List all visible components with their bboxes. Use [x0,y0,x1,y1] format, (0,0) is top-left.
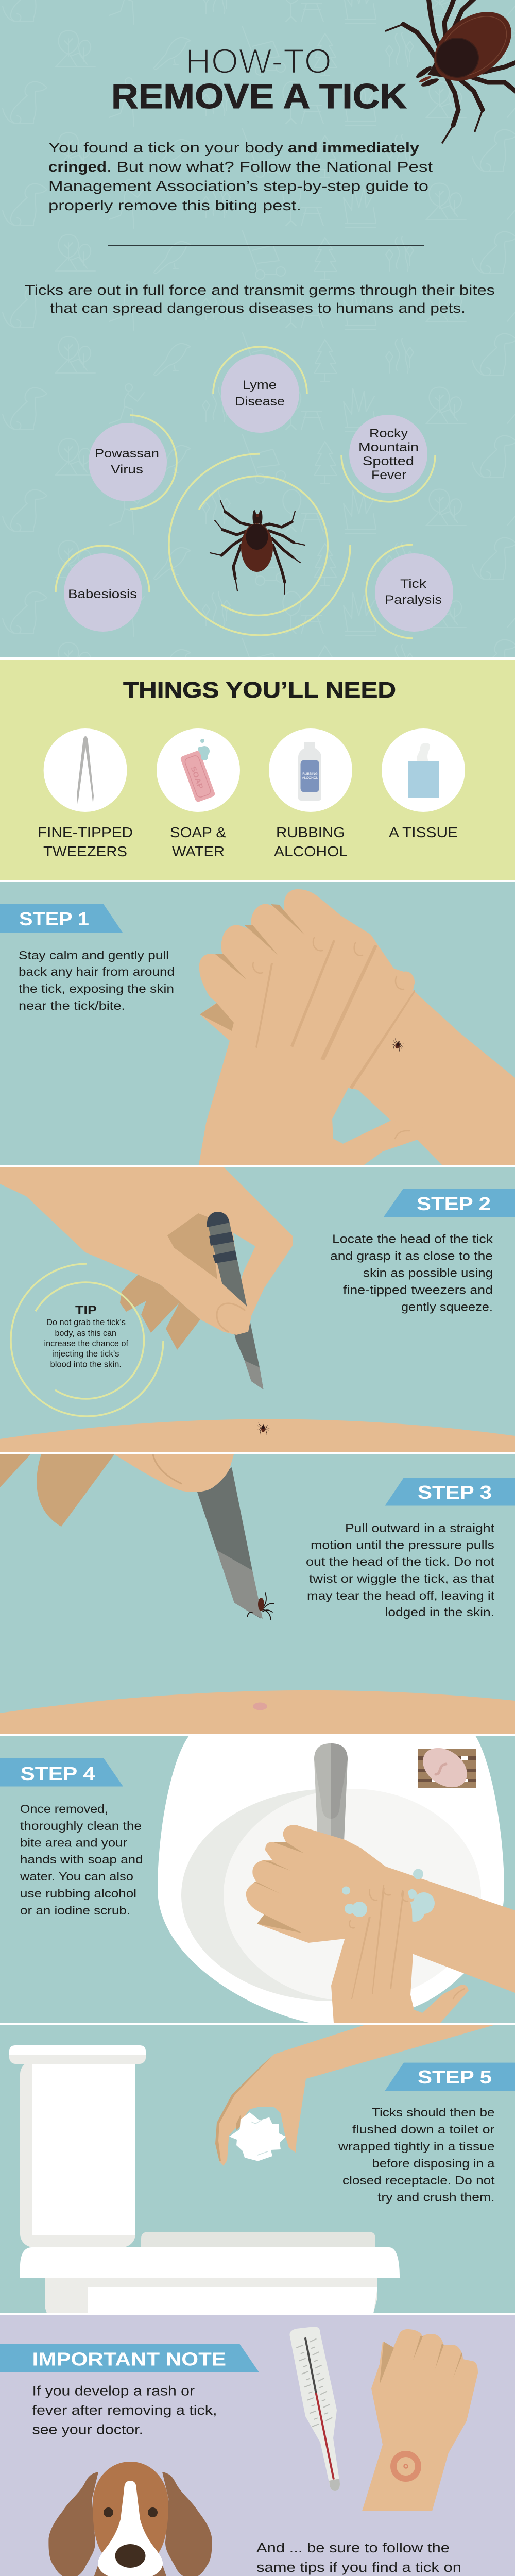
panel: things you'll need [0,660,515,880]
step 2 ribbon [384,1189,515,1217]
disease: Rocky Mountain Spotted Fever: Spotted [363,454,414,468]
disease: Babesiosis: Babesiosis [68,587,137,601]
step 1 text [19,948,175,1012]
step 5 ribbon: STEP 5 [418,2066,492,2088]
ticks paragraph: that can spread dangerous diseases to humans and pets. [50,300,466,316]
illustration: hand holding tissue [215,2025,494,2166]
step 2 text: gently squeeze. [401,1300,493,1314]
illustration: washing hand [331,1880,469,2023]
item: soap and water: WATER [172,843,225,859]
step 3 text [306,1521,495,1619]
step 4 text: hands with soap and [20,1853,143,1866]
icon: soap foam [342,1869,435,1922]
icon: tick held by tweezers [247,1593,274,1620]
item: rubbing alcohol: ALCOHOL [274,843,348,859]
illustration: skin bump [0,1419,515,1452]
tip callout: body, as this can [55,1329,116,1338]
step 5 text: try and crush them. [377,2191,494,2204]
disease: Tick Paralysis: Paralysis [385,593,442,607]
step 1 text: back any hair from around [19,965,175,978]
step 4 ribbon: STEP 4 [21,1763,95,1784]
intro paragraph: cringed [48,159,107,175]
note text: see your doctor. [32,2422,143,2437]
illustration: hand with tweezers [0,1167,293,1389]
intro paragraph: You found a tick on your body [48,140,283,156]
step 5 text [338,2106,495,2204]
item: rubbing alcohol: RUBBING [302,772,318,776]
note text: If you develop a rash or [32,2384,195,2399]
disease: Powassan Virus: Powassan [95,447,159,461]
disease: Rocky Mountain Spotted Fever: Fever [371,468,406,482]
step 2 text: and grasp it as close to the [330,1249,493,1262]
step 4 text: water. You can also [20,1870,133,1883]
step 4 text [20,1802,143,1917]
step 5 text: flushed down a toilet or [352,2123,495,2136]
item: soap and water: SOAP [189,765,205,790]
tip callout: blood into the skin. [50,1360,122,1369]
step 4 text: Once removed, [20,1802,108,1816]
heading: THINGS YOU’LL NEED [123,677,396,703]
illustration: hands pulling back hair [199,889,515,1165]
illustration: fist and arm [246,1825,515,1993]
step 3 text: lodged in the skin. [385,1605,494,1619]
tip callout: injecting the tick’s [52,1349,119,1359]
disease: Powassan Virus: Virus [111,463,143,477]
pet tip text [256,2541,461,2576]
step 2 text: skin as possible using [363,1266,493,1280]
step 4 text: use rubbing alcohol [20,1887,136,1900]
disease: Lyme Disease: Disease [235,395,285,409]
step 1 text: near the tick/bite. [19,999,125,1012]
step 1 ribbon: STEP 1 [19,908,89,929]
ticks paragraph [25,282,495,316]
disease: Rocky Mountain Spotted Fever: Rocky [369,427,408,440]
panel: important note [0,2315,515,2576]
intro paragraph [48,140,433,213]
tip callout [11,1264,163,1416]
step 3 text: may tear the head off, leaving it [307,1589,495,1602]
intro paragraph: Management Association’s step-by-step guide to [48,178,428,194]
important note ribbon [0,2344,259,2372]
step 4 text: thoroughly clean the [20,1819,142,1833]
step 4 ribbon [0,1758,123,1787]
step 2 text [330,1232,493,1314]
ticks paragraph: Ticks are out in full force and transmit germs through their bites [25,282,495,298]
step 5 text: before disposing in a [372,2157,495,2170]
tip callout: Do not grab the tick’s [46,1318,126,1327]
disease: Powassan Virus [89,415,177,509]
tip callout: TIP [75,1303,97,1317]
central rings [169,454,350,635]
item: rubbing alcohol [269,728,352,859]
disease: Rocky Mountain Spotted Fever [341,415,435,502]
panel: step 4 [0,1736,515,2023]
disease: Tick Paralysis [366,545,453,638]
step 3 text: Pull outward in a straight [345,1521,495,1535]
icon: tick on arm [390,1038,405,1053]
illustration: hand pulling with tweezers [0,1454,263,1619]
illustration: skin bump with bite mark [0,1690,515,1734]
intro paragraph: and immediately [288,140,419,156]
title [111,42,407,116]
step 1 ribbon [0,904,123,933]
step 4 text: or an iodine scrub. [20,1904,130,1917]
step 3 text: out the head of the tick. Do not [306,1555,495,1568]
item: rubbing alcohol: ALCOHOL [302,776,318,780]
item: rubbing alcohol: RUBBING [276,824,345,840]
panel: intro [0,0,515,657]
step 3 text: twist or wiggle the tick, as that [309,1572,495,1585]
intro paragraph: properly remove this biting pest. [48,197,301,213]
step 5 text: closed receptacle. Do not [342,2174,495,2187]
step 2 text: Locate the head of the tick [332,1232,493,1246]
item: soap and water [157,728,240,859]
title: HOW-TO [185,42,332,81]
icon: tick on skin [257,1423,269,1435]
illustration: hand with bullseye rash [362,2329,478,2511]
step 1 text: the tick, exposing the skin [19,982,174,995]
panel: step 1 [0,882,515,1165]
illustration: faucet [314,1743,348,1842]
tip callout: increase the chance of [44,1339,128,1348]
pet tip text: And ... be sure to follow the [256,2541,450,2555]
icon: soap on wooden dish [416,1740,476,1795]
illustration: sink [158,1736,504,2023]
disease: Tick Paralysis: Tick [400,577,427,591]
step 1 text: Stay calm and gently pull [19,948,169,962]
disease: Rocky Mountain Spotted Fever: Mountain [358,440,419,454]
icon: thermometer [289,2327,340,2491]
step 2 ribbon: STEP 2 [417,1193,491,1214]
step 5 text: Ticks should then be [372,2106,494,2119]
disease: Lyme Disease: Lyme [243,378,277,392]
step 4 text: bite area and your [20,1836,127,1850]
step 3 ribbon: STEP 3 [418,1482,492,1503]
icon: tick in centre of diseases [210,501,305,594]
step 3 text: motion until the pressure pulls [311,1538,494,1551]
note text [32,2384,217,2437]
pet tip text: same tips if you find a tick on [256,2561,461,2575]
item: tissue: A TISSUE [389,824,458,840]
disease: Lyme Disease [213,347,307,433]
disease: Babesiosis [56,546,149,632]
item: soap and water: SOAP & [170,824,226,840]
important note ribbon: IMPORTANT NOTE [32,2348,226,2370]
step 5 text: wrapped tightly in a tissue [338,2140,494,2153]
panel: step 2 [0,1167,515,1452]
title: REMOVE A TICK [111,77,407,116]
item: tweezers: TWEEZERS [43,843,127,859]
step 2 text: fine-tipped tweezers and [343,1283,493,1297]
intro paragraph: . But now what? Follow the National Pest [107,159,433,175]
panel: step 3 [0,1454,515,1734]
illustration: toilet [9,2045,400,2313]
icon: large tick in top right corner [386,0,515,143]
step 5 ribbon [385,2063,515,2091]
item: tissue [382,728,465,840]
note text: fever after removing a tick, [32,2403,217,2418]
item: tweezers [38,728,133,859]
item: tweezers: FINE-TIPPED [38,824,133,840]
step 3 ribbon [385,1478,515,1505]
illustration: beagle dog [48,2462,212,2576]
panel: step 5 [0,2025,515,2313]
